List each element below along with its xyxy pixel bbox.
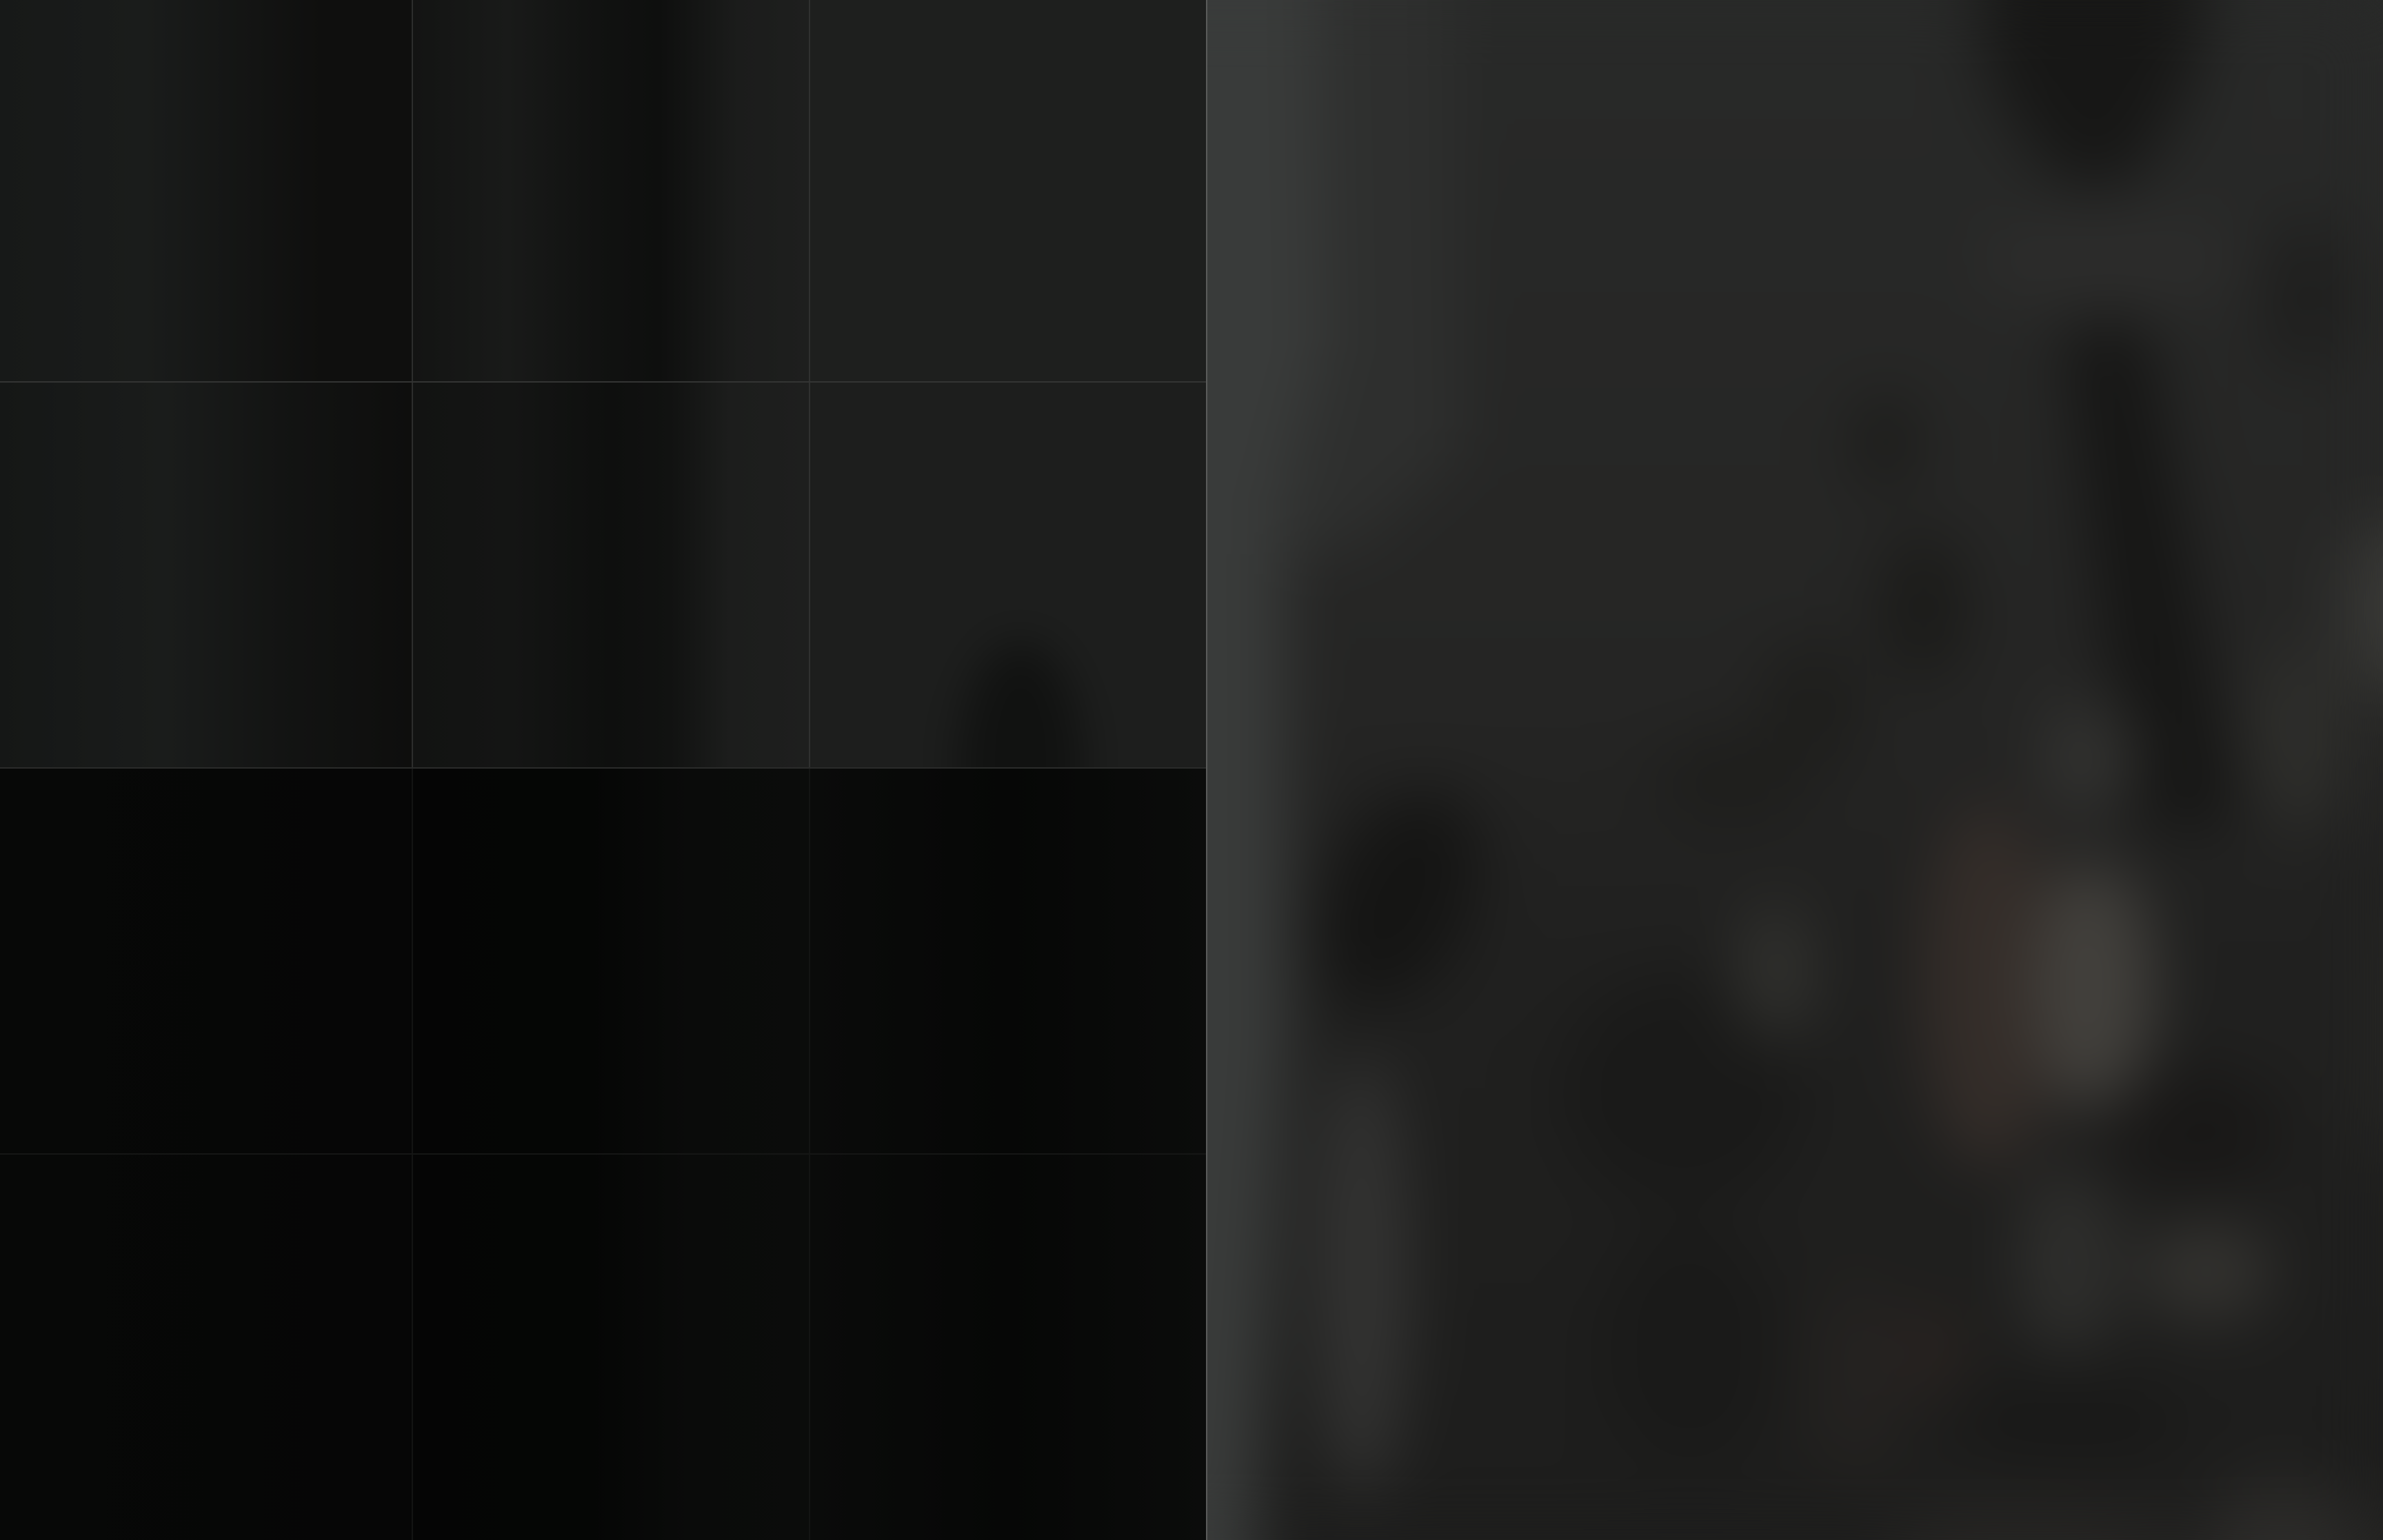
panel: large blurred photo on the right — [965, 0, 2383, 1540]
image cell: row 2 column 1 — [0, 381, 412, 768]
blurred shape: mid dark spots — [1651, 217, 2341, 824]
image cell: row 3 column 3 — [810, 768, 1207, 1153]
image cell: row 3 column 2 — [412, 768, 810, 1153]
blurred shape: warm figure — [1920, 803, 2058, 1168]
blurred shape: soft halo beside the left edge — [965, 0, 1462, 551]
image cell: row 2 column 3 — [724, 276, 1310, 896]
blurred shape: bright highlight — [2031, 862, 2155, 1110]
panel: top-left image grid — [0, 0, 1310, 896]
image cell: row 4 column 1 — [0, 1153, 412, 1540]
blurred shape: dark vertical streak — [2062, 317, 2241, 827]
panel: bottom-left image grid — [0, 768, 1207, 1540]
image cell: row 1 column 1 — [0, 0, 412, 381]
image cell: row 1 column 2 — [412, 0, 810, 381]
blurred shape: light vertical band — [1315, 1055, 1409, 1496]
blurred shape: dark patch lower left — [1286, 762, 1514, 1030]
image cell: row 4 column 3 — [810, 1153, 1207, 1540]
blurred shape: left light edge — [965, 0, 1324, 1540]
image cell: row 1 column 3 — [810, 0, 1207, 381]
image cell: row 2 column 2 — [412, 381, 810, 768]
blurred shape: dark lower centre — [1558, 972, 2282, 1468]
blurred shape: lower right lights — [1738, 210, 2383, 1540]
image cell: row 4 column 2 — [412, 1153, 810, 1540]
blurred shape: dark upper shadow — [1979, 0, 2206, 186]
image cell: row 3 column 1 — [0, 768, 412, 1153]
